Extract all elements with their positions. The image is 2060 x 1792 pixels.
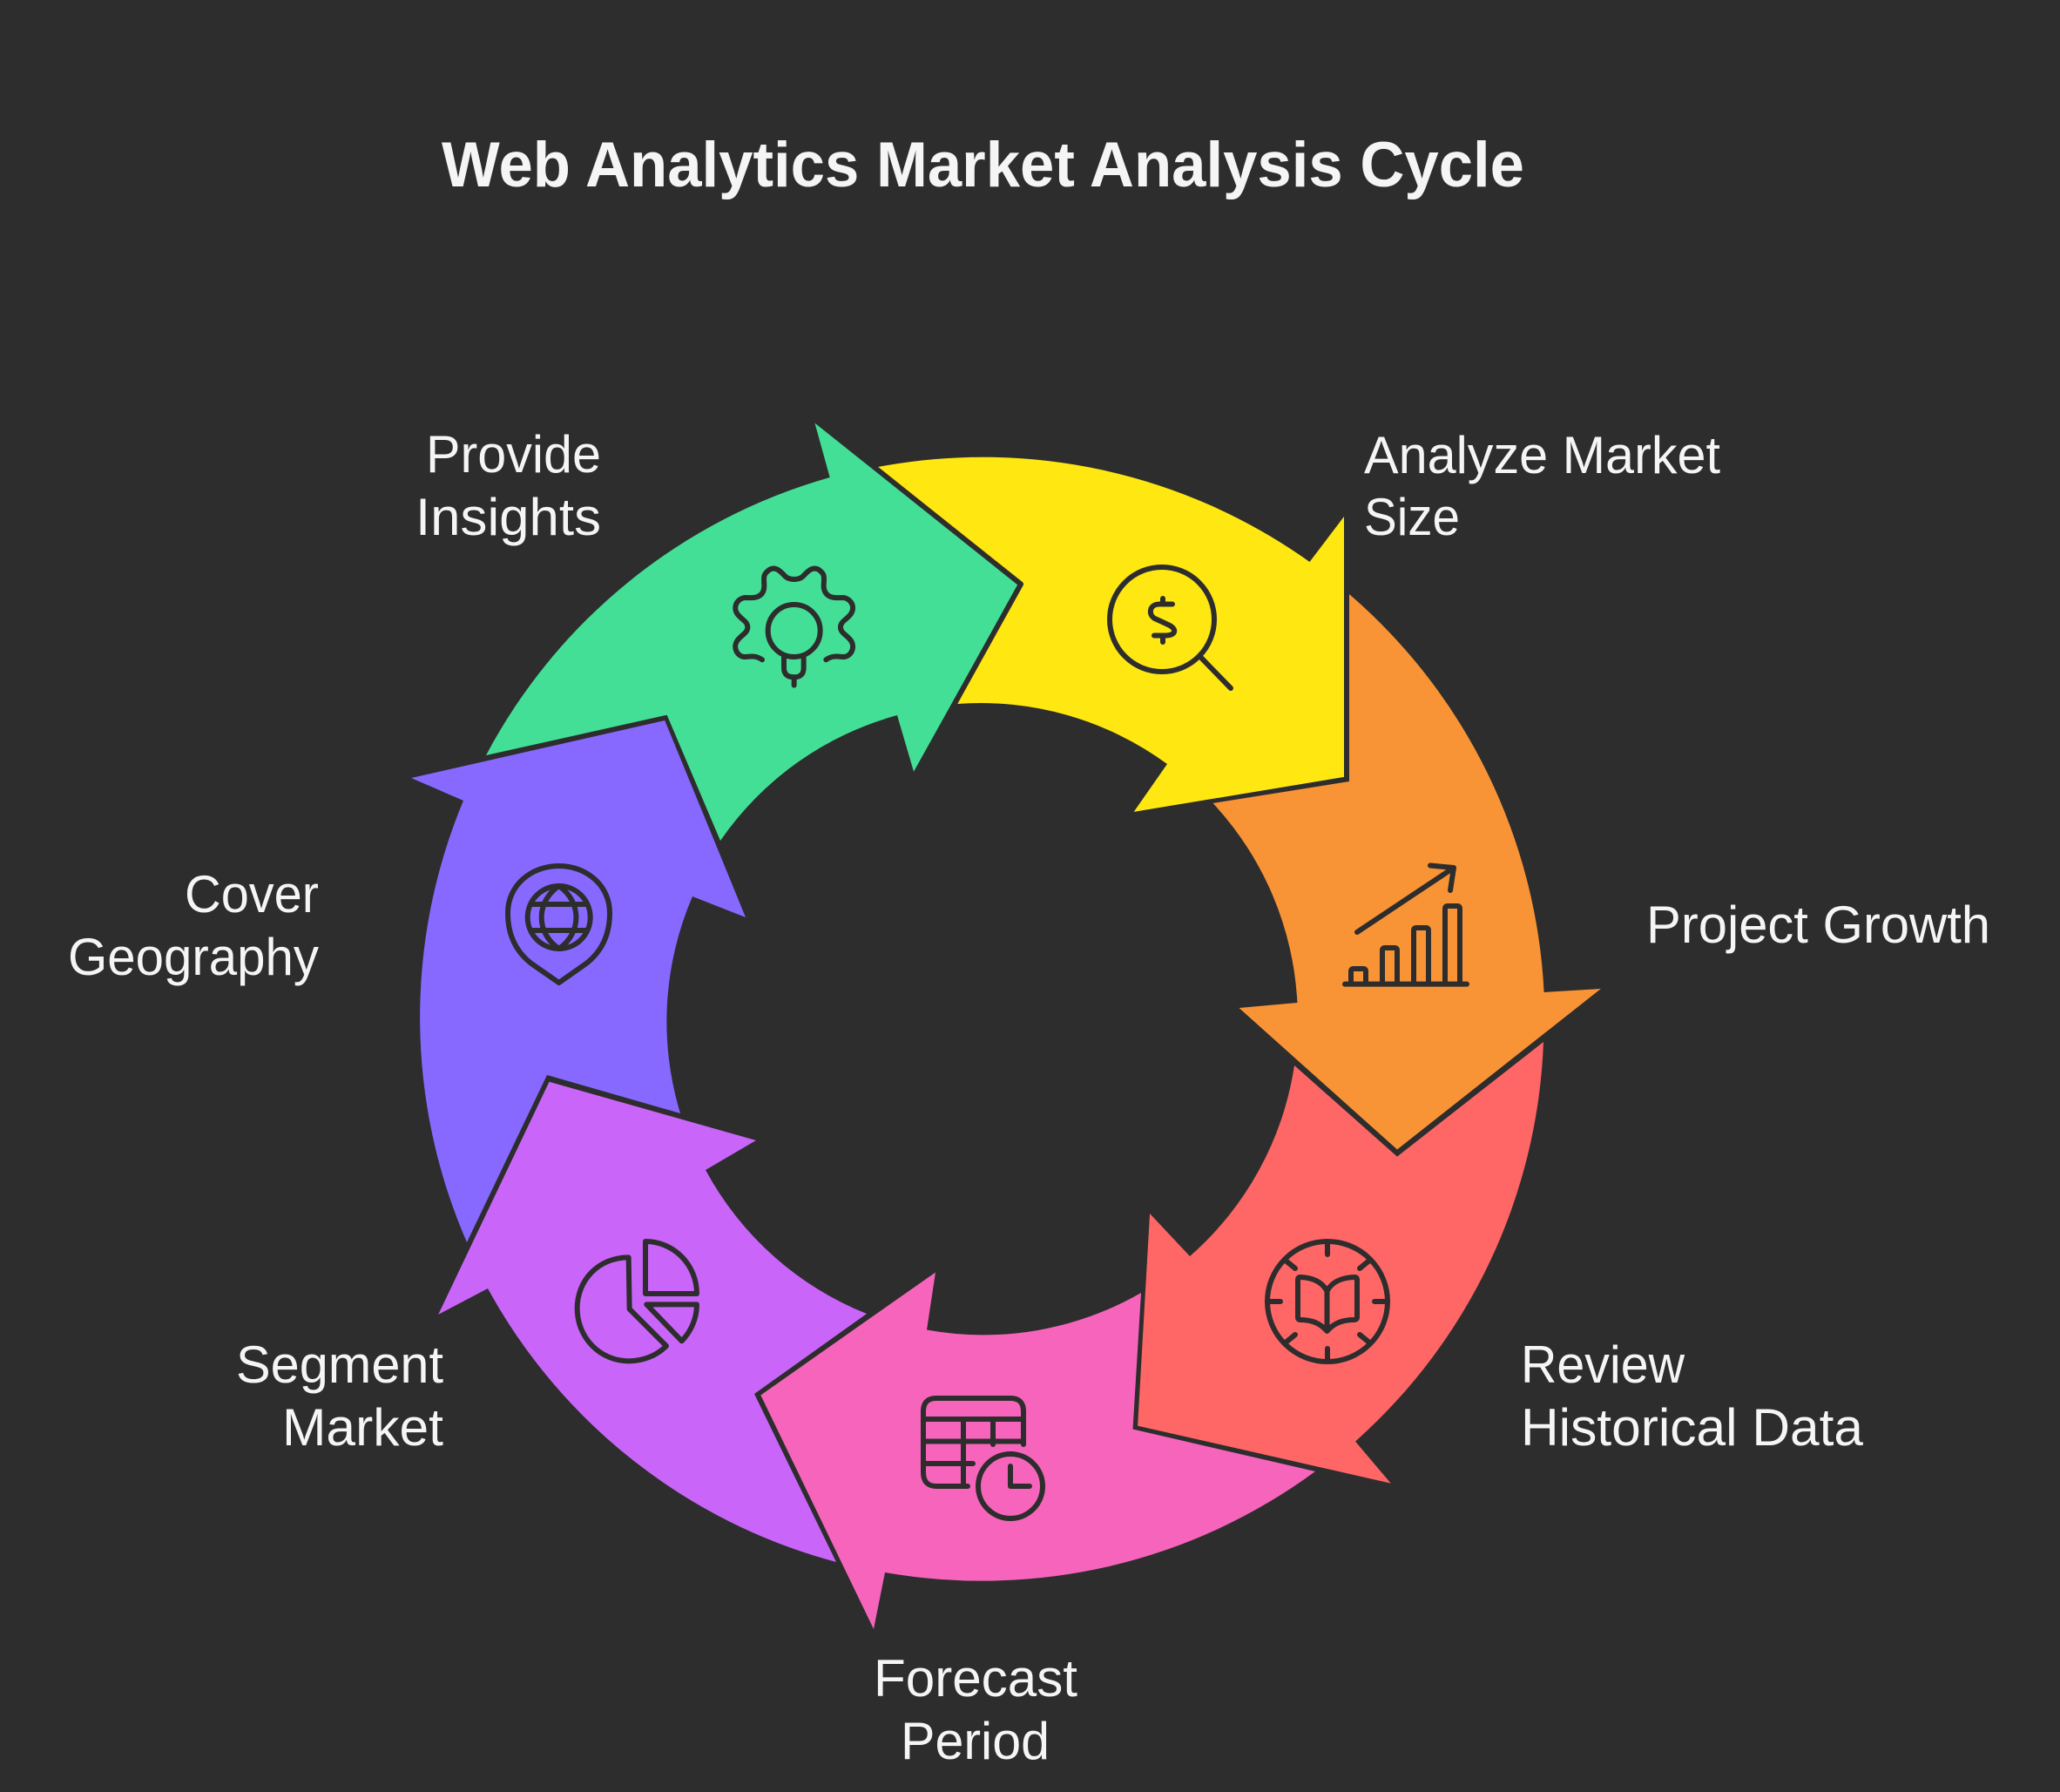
label: analyze market size: Analyze Market <box>1364 426 1720 484</box>
icon: pie chart <box>577 1241 697 1361</box>
arrow: analyze market size (yellow) <box>878 457 1347 815</box>
label: provide insights: Insights <box>415 488 601 546</box>
arrow: forecast period (pink) <box>758 1270 1315 1630</box>
label: analyze market size: Size <box>1364 488 1460 546</box>
cycle diagram <box>411 421 1602 1630</box>
icon: book in compass <box>1267 1241 1388 1362</box>
label: provide insights: Provide <box>426 425 601 484</box>
label: forecast period: Period <box>901 1712 1050 1770</box>
label: segment market <box>236 1336 443 1457</box>
arrow: project growth (orange) <box>1213 594 1602 1153</box>
label: cover geography <box>68 865 319 986</box>
arrow: provide insights (green) <box>486 421 1021 841</box>
label: analyze market size <box>1364 426 1720 546</box>
label: forecast period: Forecast <box>874 1649 1077 1707</box>
label: segment market: Market <box>282 1398 443 1457</box>
icon: globe pin <box>508 866 610 983</box>
arrow: segment market (magenta) <box>436 1079 867 1562</box>
icon: lightbulb gear <box>735 569 853 686</box>
label: project growth: Project Growth <box>1646 896 1990 954</box>
title: Web Analytics Market Analysis Cycle <box>442 130 1524 200</box>
arrow: review historical data (red) <box>1135 1042 1543 1486</box>
label: review historical data <box>1521 1336 1864 1457</box>
label: provide insights <box>415 425 601 546</box>
icon: growth bars and arrow <box>1345 866 1467 984</box>
arrow: cover geography (indigo) <box>411 718 748 1242</box>
label: segment market: Segment <box>236 1336 443 1394</box>
label: forecast period <box>874 1649 1077 1770</box>
label: review historical data: Historical Data <box>1521 1398 1864 1457</box>
label: cover geography: Cover <box>185 865 319 923</box>
label: review historical data: Review <box>1521 1336 1685 1394</box>
icon: magnifier with dollar <box>1110 567 1231 688</box>
icon: table with clock <box>923 1398 1043 1518</box>
label: cover geography: Geography <box>68 928 319 986</box>
